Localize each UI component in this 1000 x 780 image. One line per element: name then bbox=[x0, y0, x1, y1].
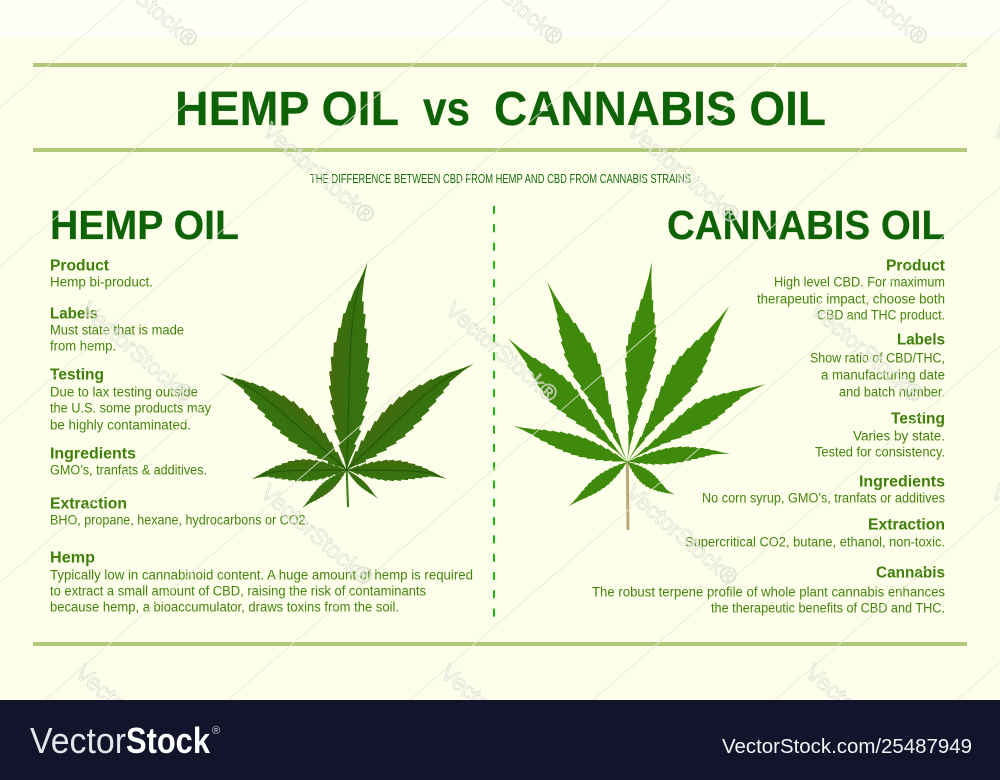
text block: labels: Labels bbox=[50, 306, 98, 322]
text block: testing bbox=[815, 410, 945, 460]
text block: testing: Varies by state. bbox=[853, 428, 945, 444]
top rule bbox=[33, 63, 967, 67]
watermark overlay: VectorStock® bbox=[76, 296, 198, 407]
text block: ingredients bbox=[50, 446, 207, 478]
dashed divider bbox=[493, 206, 495, 620]
footer logo: Stock bbox=[126, 720, 211, 761]
text block: testing: Testing bbox=[891, 410, 945, 428]
watermark overlay: VectorStock® bbox=[258, 117, 380, 228]
text block: cannabis: The robust terpene profile of whole plant cannabis enhances bbox=[592, 584, 945, 600]
text block: cannabis: the therapeutic benefits of CBD and THC. bbox=[711, 600, 945, 616]
title: HEMP OIL bbox=[175, 83, 399, 136]
text block: labels: Show ratio of CBD/THC, bbox=[810, 350, 945, 366]
panel: hemp oil bbox=[50, 202, 473, 614]
watermark overlay: VectorStock® bbox=[806, 296, 928, 407]
heading: cannabis oil: CANNABIS OIL bbox=[667, 202, 945, 248]
text block: product: CBD and THC product. bbox=[817, 308, 945, 322]
text block: cannabis: Cannabis bbox=[876, 564, 945, 582]
text block: ingredients: Ingredients bbox=[50, 446, 136, 462]
text block: hemp: Typically low in cannabinoid content. A huge amount of hemp is required bbox=[50, 568, 473, 582]
text block: ingredients: Ingredients bbox=[859, 474, 945, 490]
subtitle: THE DIFFERENCE BETWEEN CBD FROM HEMP AND CBD FROM CANNABIS STRAINS bbox=[310, 171, 691, 186]
watermark overlay: VectorStock® bbox=[71, 659, 193, 770]
footer bar bbox=[0, 700, 1000, 780]
watermark overlay: VectorStock® bbox=[256, 479, 378, 590]
footer logo bbox=[30, 720, 220, 761]
watermark overlay: VectorStock® bbox=[441, 296, 563, 407]
text block: product: Product bbox=[50, 258, 109, 274]
text block: product: High level CBD. For maximum bbox=[774, 274, 945, 290]
icon: cannabis leaf bbox=[498, 260, 768, 530]
watermark overlay: VectorStock® bbox=[623, 117, 745, 228]
text block: ingredients: No corn syrup, GMO’s, tranfats or additives bbox=[702, 490, 945, 506]
watermark overlay: VectorStock® bbox=[801, 659, 923, 770]
rule under title bbox=[33, 148, 967, 152]
text block: labels bbox=[50, 306, 184, 354]
text block: hemp: to extract a small amount of CBD, raising the risk of contaminants bbox=[50, 584, 426, 598]
text block: labels: Must state that is made bbox=[50, 322, 184, 338]
footer image id: VectorStock.com/25487949 bbox=[722, 736, 972, 758]
text block: labels: from hemp. bbox=[50, 338, 116, 354]
watermark overlay: VectorStock® bbox=[436, 659, 558, 770]
text block: testing: the U.S. some products may bbox=[50, 400, 211, 416]
text block: labels: a manufacturing date bbox=[821, 368, 945, 382]
text block: cannabis bbox=[592, 564, 945, 616]
title: CANNABIS OIL bbox=[494, 83, 826, 136]
text block: ingredients: GMO’s, tranfats & additives. bbox=[50, 462, 207, 478]
text block: testing: be highly contaminated. bbox=[50, 418, 191, 432]
footer logo: Vector bbox=[30, 720, 126, 761]
text block: testing bbox=[50, 366, 211, 432]
text block: product: Hemp bi-product. bbox=[50, 274, 153, 290]
text block: extraction: Supercritical CO2, butane, ethanol, non-toxic. bbox=[685, 534, 945, 550]
text block: extraction: Extraction bbox=[868, 516, 945, 534]
text block: ingredients bbox=[702, 474, 945, 506]
text block: extraction: BHO, propane, hexane, hydrocarbons or CO2. bbox=[50, 512, 309, 528]
heading: hemp oil: HEMP OIL bbox=[50, 202, 239, 248]
text block: labels: and batch number. bbox=[839, 384, 945, 400]
text block: product bbox=[757, 258, 945, 322]
text block: labels: Labels bbox=[897, 332, 945, 348]
title bbox=[175, 83, 826, 136]
text block: hemp: because hemp, a bioaccumulator, draws toxins from the soil. bbox=[50, 600, 399, 614]
text block: extraction bbox=[50, 496, 309, 528]
bottom rule bbox=[33, 642, 967, 646]
text block: product: therapeutic impact, choose both bbox=[757, 292, 945, 306]
text block: product: Product bbox=[886, 258, 945, 274]
watermark overlay: VectorStock® bbox=[621, 479, 743, 590]
text block: hemp: Hemp bbox=[50, 550, 95, 566]
text block: labels bbox=[810, 332, 945, 400]
icon: hemp leaf bbox=[217, 262, 477, 513]
panel: cannabis oil bbox=[592, 202, 945, 616]
text block: extraction: Extraction bbox=[50, 496, 127, 512]
footer logo: ® bbox=[212, 725, 220, 737]
text block: testing: Testing bbox=[50, 366, 104, 384]
title: vs bbox=[423, 83, 470, 136]
text block: product bbox=[50, 258, 153, 290]
text block: testing: Due to lax testing outside bbox=[50, 384, 198, 400]
text block: testing: Tested for consistency. bbox=[815, 444, 945, 460]
text block: hemp bbox=[50, 550, 473, 614]
text block: extraction bbox=[685, 516, 945, 550]
